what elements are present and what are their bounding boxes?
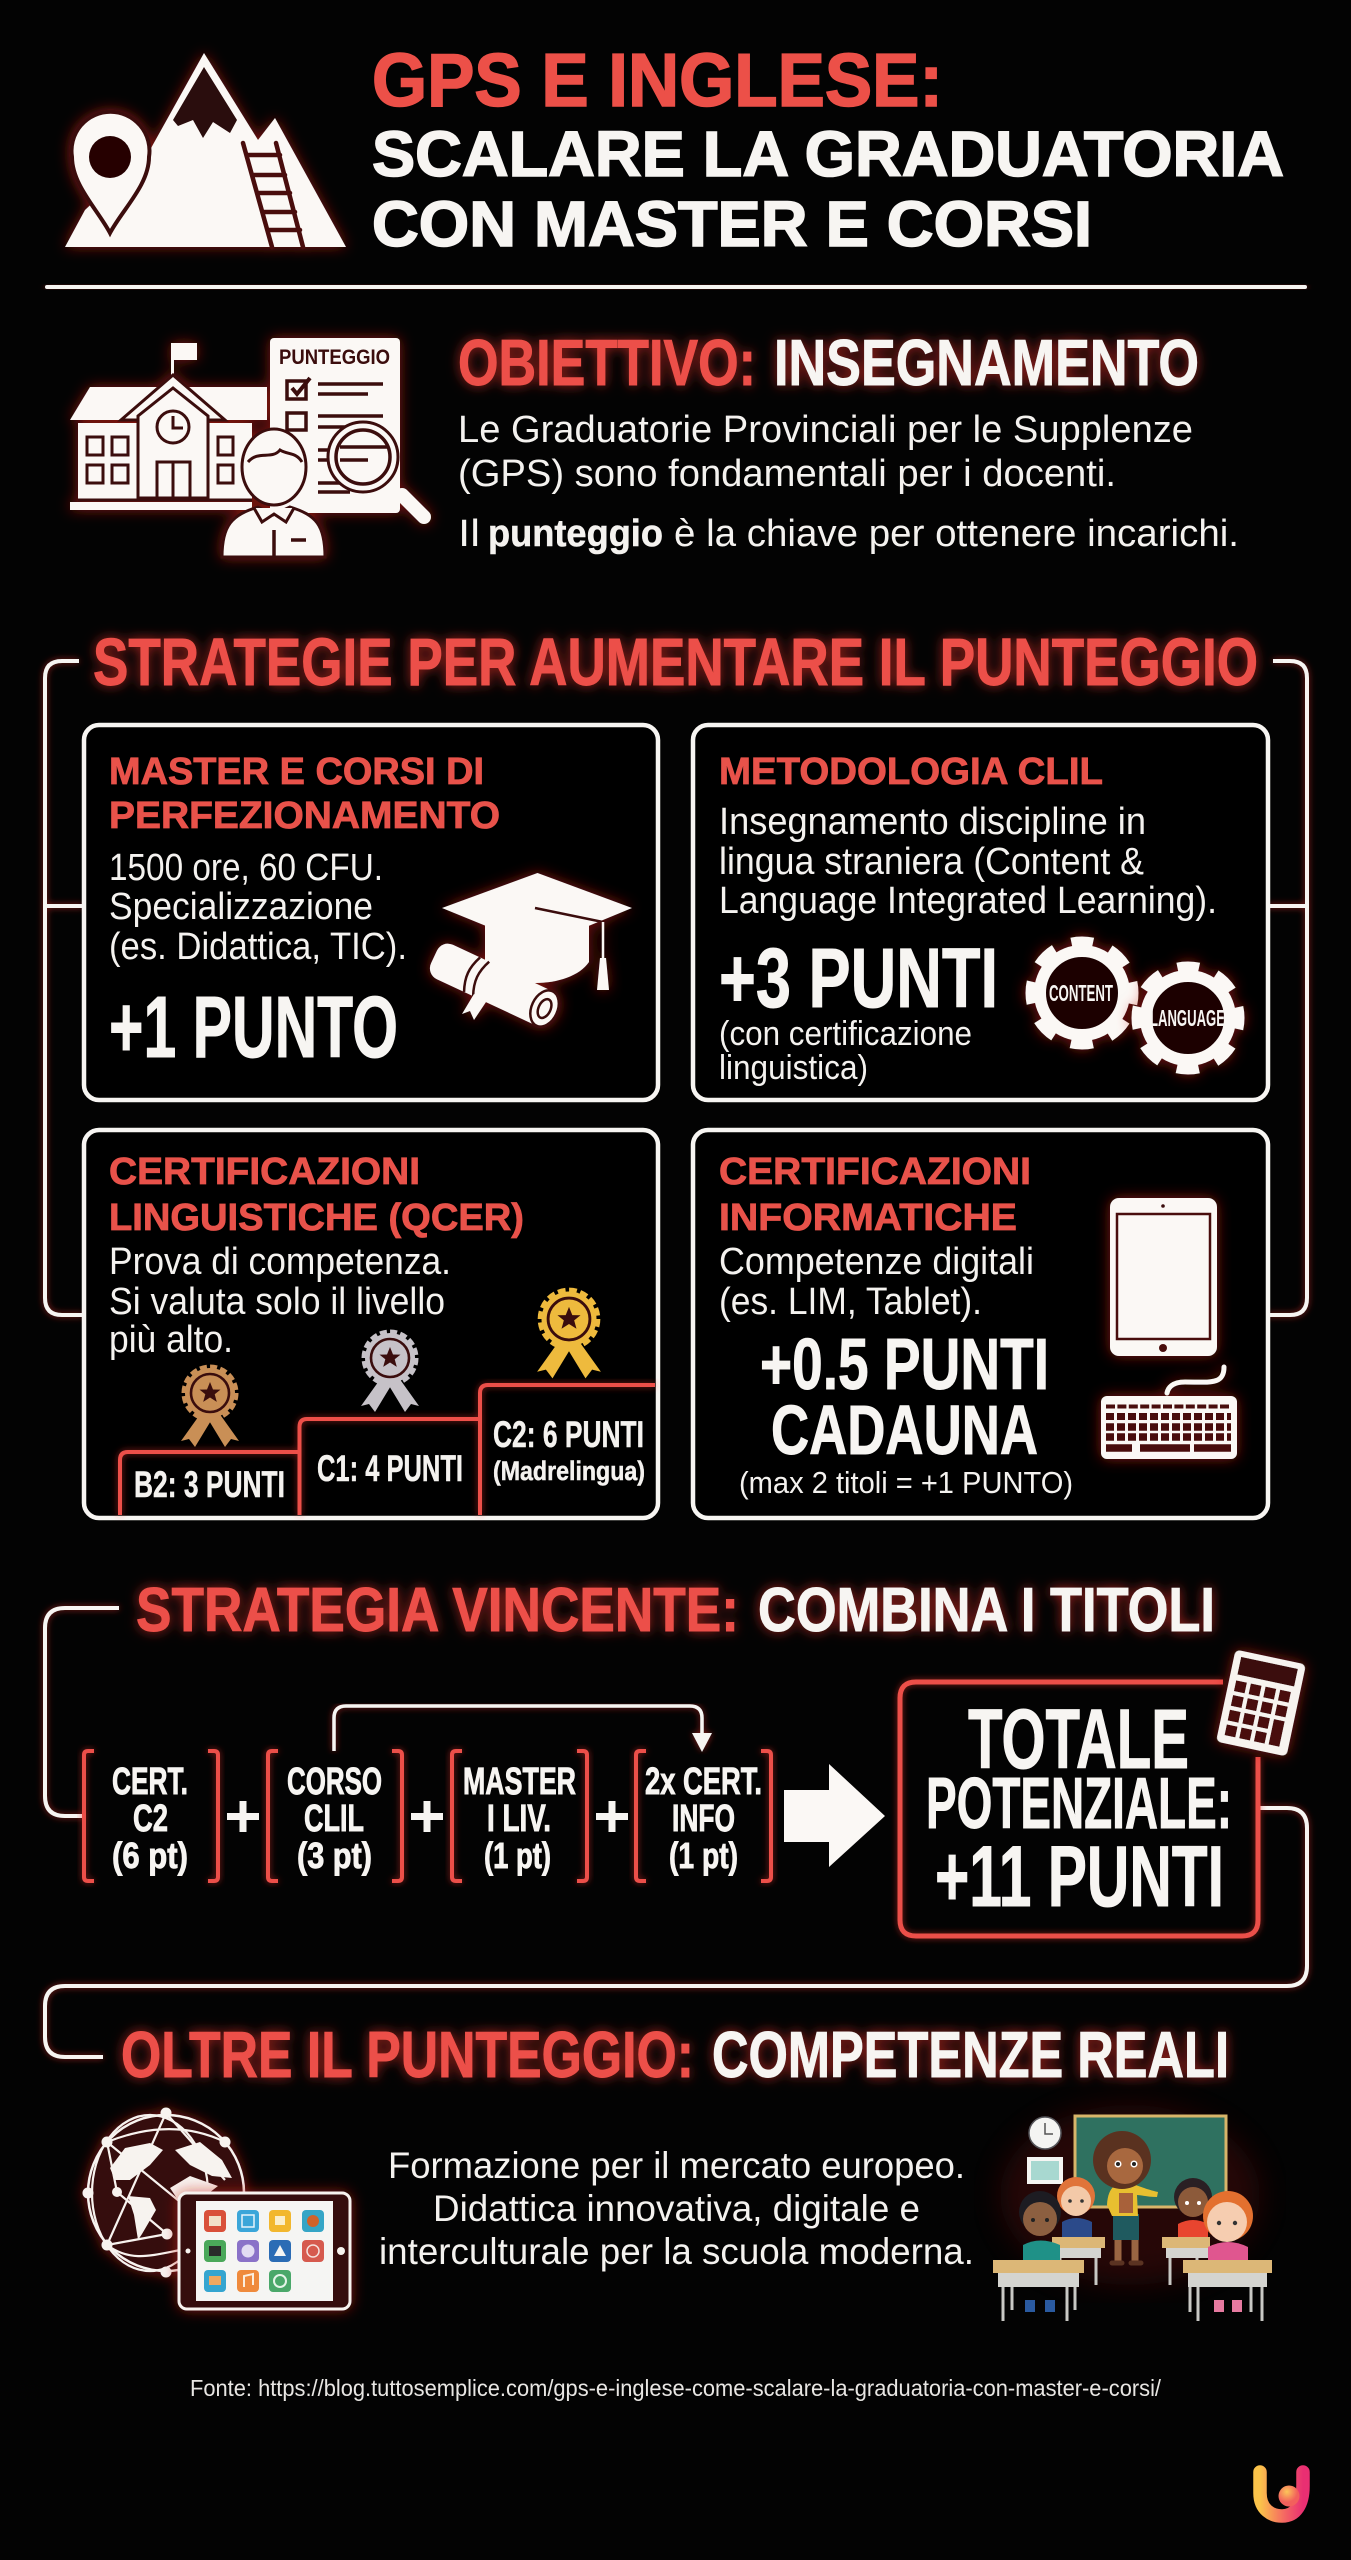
card text: Specializzazione bbox=[109, 886, 373, 928]
card text: Insegnamento discipline in bbox=[719, 801, 1146, 843]
formula: 2x cert info: INFO bbox=[672, 1798, 735, 1840]
score: +1 punto: +1 PUNTO bbox=[109, 979, 398, 1076]
text: intro paragraph bbox=[458, 409, 1239, 555]
score note: (con certificazione bbox=[719, 1015, 972, 1053]
formula: master i liv: MASTER bbox=[463, 1761, 576, 1803]
heading: oltre il punteggio bbox=[121, 2018, 1229, 2091]
card text: più alto. bbox=[109, 1319, 233, 1361]
formula: master i liv: (1 pt) bbox=[484, 1835, 551, 1876]
formula: corso clil bbox=[268, 1751, 402, 1881]
formula: cert c2 bbox=[84, 1751, 218, 1881]
formula: corso clil: (3 pt) bbox=[297, 1835, 372, 1876]
icon: score sheet bbox=[270, 338, 424, 517]
title: GPS E INGLESE: bbox=[372, 38, 943, 122]
icon: mountain with pin and ladder bbox=[65, 53, 346, 247]
title: CON MASTER E CORSI bbox=[372, 188, 1092, 260]
podium labels: C1: 4 PUNTI bbox=[317, 1448, 463, 1489]
card text bbox=[109, 847, 407, 968]
icon: language gear: LANGUAGE bbox=[1150, 1005, 1225, 1031]
icon: gold medal bbox=[537, 1290, 601, 1378]
text: intro paragraph: (GPS) sono fondamentali per i docenti. bbox=[458, 453, 1116, 495]
icon: calculator bbox=[1216, 1650, 1306, 1756]
heading: strategia vincente: STRATEGIA VINCENTE: bbox=[136, 1576, 739, 1645]
card heading bbox=[109, 1151, 524, 1239]
text: closing paragraph: Formazione per il mercato europeo. bbox=[388, 2145, 965, 2186]
card heading: CERTIFICAZIONI bbox=[109, 1151, 420, 1193]
formula: master i liv: I LIV. bbox=[487, 1798, 551, 1840]
card heading: INFORMATICHE bbox=[719, 1197, 1017, 1239]
formula: cert c2: C2 bbox=[133, 1798, 168, 1840]
icon: language gear bbox=[1137, 967, 1239, 1069]
card text bbox=[719, 1241, 1034, 1323]
icon: keyboard bbox=[1101, 1367, 1237, 1459]
front desks and pupils bbox=[993, 2191, 1272, 2321]
score note bbox=[719, 1015, 972, 1087]
heading: obiettivo: INSEGNAMENTO bbox=[774, 326, 1199, 399]
podium labels: C2: 6 PUNTI bbox=[493, 1414, 644, 1455]
card text: 1500 ore, 60 CFU. bbox=[109, 847, 383, 889]
card heading: LINGUISTICHE (QCER) bbox=[109, 1197, 524, 1239]
formula: master i liv bbox=[452, 1751, 587, 1881]
card text: Prova di competenza. bbox=[109, 1241, 451, 1283]
card text: (es. Didattica, TIC). bbox=[109, 926, 407, 968]
formula: cert c2: (6 pt) bbox=[112, 1835, 188, 1876]
panel: master e corsi bbox=[84, 725, 658, 1100]
formula: cert c2: CERT. bbox=[112, 1761, 188, 1803]
card heading: METODOLOGIA CLIL bbox=[719, 751, 1103, 793]
card heading: PERFEZIONAMENTO bbox=[109, 795, 500, 837]
callout: totale potenziale bbox=[900, 1682, 1258, 1936]
icon: content gear: CONTENT bbox=[1049, 980, 1113, 1006]
icon: graduation cap and diploma bbox=[426, 873, 632, 1031]
formula: corso clil: CLIL bbox=[304, 1798, 364, 1840]
icon: content gear bbox=[1031, 942, 1133, 1044]
heading: obiettivo bbox=[458, 326, 1199, 399]
podium labels: B2: 3 PUNTI bbox=[134, 1464, 285, 1505]
card text: Si valuta solo il livello bbox=[109, 1281, 445, 1323]
logo bbox=[1260, 2472, 1303, 2516]
panel: certificazioni informatiche bbox=[693, 1130, 1268, 1518]
formula: 2x cert info bbox=[636, 1751, 771, 1881]
icon: tablet bbox=[1110, 1198, 1217, 1356]
plus sign bbox=[411, 1801, 443, 1832]
score: +3 punti: +3 PUNTI bbox=[719, 931, 998, 1025]
heading: strategia vincente: COMBINA I TITOLI bbox=[758, 1576, 1215, 1645]
arrow: to total bbox=[784, 1764, 885, 1867]
icon: score sheet: PUNTEGGIO bbox=[279, 346, 390, 369]
teacher bbox=[1093, 2131, 1158, 2263]
panel: certificazioni linguistiche bbox=[84, 1130, 658, 1518]
title bbox=[372, 38, 1284, 260]
formula: 2x cert info: (1 pt) bbox=[669, 1835, 738, 1876]
card heading bbox=[719, 1151, 1031, 1239]
score: +0.5 punti cadauna: +0.5 PUNTI bbox=[760, 1325, 1049, 1405]
text: intro paragraph: Il bbox=[458, 513, 480, 555]
score note: (max 2 titoli = +1 PUNTO) bbox=[739, 1465, 1073, 1500]
plus sign bbox=[227, 1801, 259, 1832]
chalkboard bbox=[1075, 2116, 1226, 2207]
score: +0.5 punti cadauna bbox=[760, 1325, 1049, 1469]
formula: corso clil: CORSO bbox=[287, 1761, 382, 1803]
card text bbox=[719, 801, 1217, 922]
panel: metodologia clil bbox=[693, 725, 1268, 1100]
title: SCALARE LA GRADUATORIA bbox=[372, 118, 1284, 190]
card heading: CERTIFICAZIONI bbox=[719, 1151, 1031, 1193]
icon: school building bbox=[70, 343, 267, 510]
heading: strategia vincente bbox=[136, 1576, 1215, 1645]
card text: (es. LIM, Tablet). bbox=[719, 1281, 982, 1323]
text: closing paragraph bbox=[379, 2145, 974, 2272]
score note: linguistica) bbox=[719, 1049, 868, 1087]
arrow: corso clil to cert info bbox=[334, 1706, 712, 1752]
text: intro paragraph: punteggio bbox=[488, 513, 663, 555]
source line: Fonte: https://blog.tuttosemplice.com/gps-e-inglese-come-scalare-la-graduatoria-con-master-e-corsi/ bbox=[190, 2375, 1162, 2401]
illustration: classroom bbox=[993, 2105, 1272, 2321]
plus sign bbox=[596, 1801, 628, 1832]
icon: bronze medal bbox=[181, 1367, 239, 1447]
icon: clock and calendar bbox=[1027, 2117, 1063, 2184]
callout: totale potenziale: TOTALE bbox=[968, 1692, 1189, 1786]
card text: Language Integrated Learning). bbox=[719, 880, 1217, 922]
text: closing paragraph: Didattica innovativa, digitale e bbox=[433, 2188, 920, 2229]
icon: teacher bbox=[222, 429, 325, 557]
text: intro paragraph: è la chiave per ottenere incarichi. bbox=[674, 513, 1239, 555]
card text: lingua straniera (Content & bbox=[719, 841, 1144, 883]
card text bbox=[109, 1241, 451, 1361]
formula: 2x cert info: 2x CERT. bbox=[645, 1761, 762, 1803]
icon: school, score sheet, teacher and magnifier bbox=[70, 338, 424, 557]
back desks and pupils bbox=[1052, 2177, 1212, 2285]
heading: obiettivo: OBIETTIVO: bbox=[458, 326, 756, 399]
icon: tablet with apps bbox=[179, 2193, 350, 2309]
text: intro paragraph: Le Graduatorie Provinciali per le Supplenze bbox=[458, 409, 1193, 451]
callout: totale potenziale: +11 PUNTI bbox=[935, 1829, 1224, 1925]
icon: globe network bbox=[82, 2108, 244, 2278]
icon: silver medal bbox=[361, 1332, 419, 1412]
score: +0.5 punti cadauna: CADAUNA bbox=[771, 1391, 1038, 1469]
podium labels: (Madrelingua) bbox=[493, 1456, 645, 1486]
text: closing paragraph: interculturale per la scuola moderna. bbox=[379, 2231, 974, 2272]
podium steps bbox=[120, 1385, 655, 1515]
card heading bbox=[109, 751, 500, 837]
heading: oltre il punteggio: OLTRE IL PUNTEGGIO: bbox=[121, 2018, 694, 2091]
card text: Competenze digitali bbox=[719, 1241, 1034, 1283]
card heading: MASTER E CORSI DI bbox=[109, 751, 484, 793]
podium labels bbox=[134, 1414, 645, 1505]
